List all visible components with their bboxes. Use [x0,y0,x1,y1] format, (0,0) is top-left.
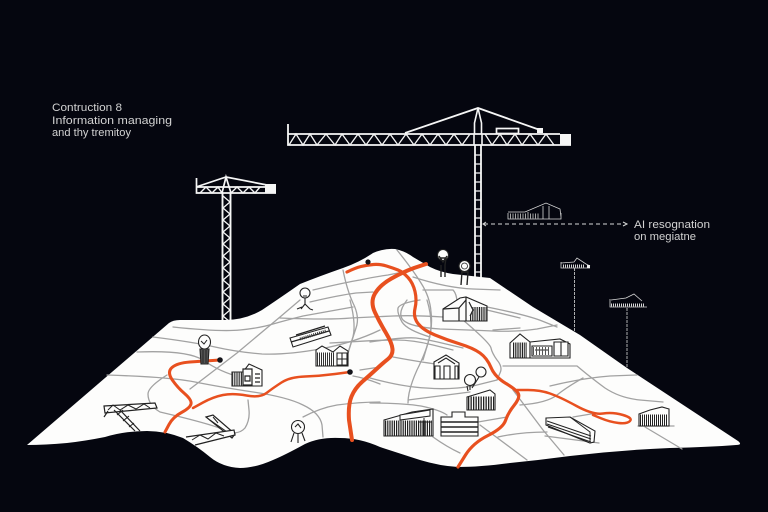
heading: top-left caption: and thy tremitoy [52,127,131,139]
callout: AI recognition label [634,219,710,243]
large tower crane [288,108,571,278]
orange routes [165,264,631,467]
building: flat striped block [441,412,478,436]
route: left loop [165,360,220,432]
building: chapel [434,355,459,379]
route: summit to lower middle [349,264,426,440]
building: twin gable [316,346,348,366]
route: summit to lower right [347,264,519,467]
route: branch with loop at right [517,390,631,423]
buildings [104,297,669,445]
route: left to centre junction [193,372,350,408]
terrain map surface [27,249,740,468]
building: barn near summit [443,297,487,321]
marker: left balloon figure [198,335,210,364]
building: factory lower centre [384,409,433,436]
callout: AI recognition label: AI resognation [634,219,710,231]
marker: badge figure lower [291,420,305,443]
AI recognition marker: building outline and dashed arrow [483,203,627,226]
route node dots [217,259,371,375]
marker: summit figure one [438,250,448,277]
building: diagonal block [546,417,595,443]
building: long slanted block [290,326,331,347]
people and balloon-head markers [198,250,486,443]
truss bridge right [186,415,235,445]
heading: top-left caption: Information managing [52,115,172,127]
small survey signs on poles [561,258,647,386]
building: gabled hall right [510,334,570,358]
marker: summit figure two [459,260,470,285]
marker: figure on slope [297,288,313,310]
building: ribbed shed [467,390,495,410]
road network: grey contour lines [107,250,682,460]
building: house with stripes, left [232,364,262,386]
heading: top-left caption [52,102,172,139]
small tower crane [196,177,276,326]
building: small hall far right [639,407,669,426]
heading: top-left caption: Contruction 8 [52,102,122,114]
callout: AI recognition label: on megiatne [634,231,696,243]
truss bridge left [104,403,157,431]
marker: twin balloons [464,367,486,391]
